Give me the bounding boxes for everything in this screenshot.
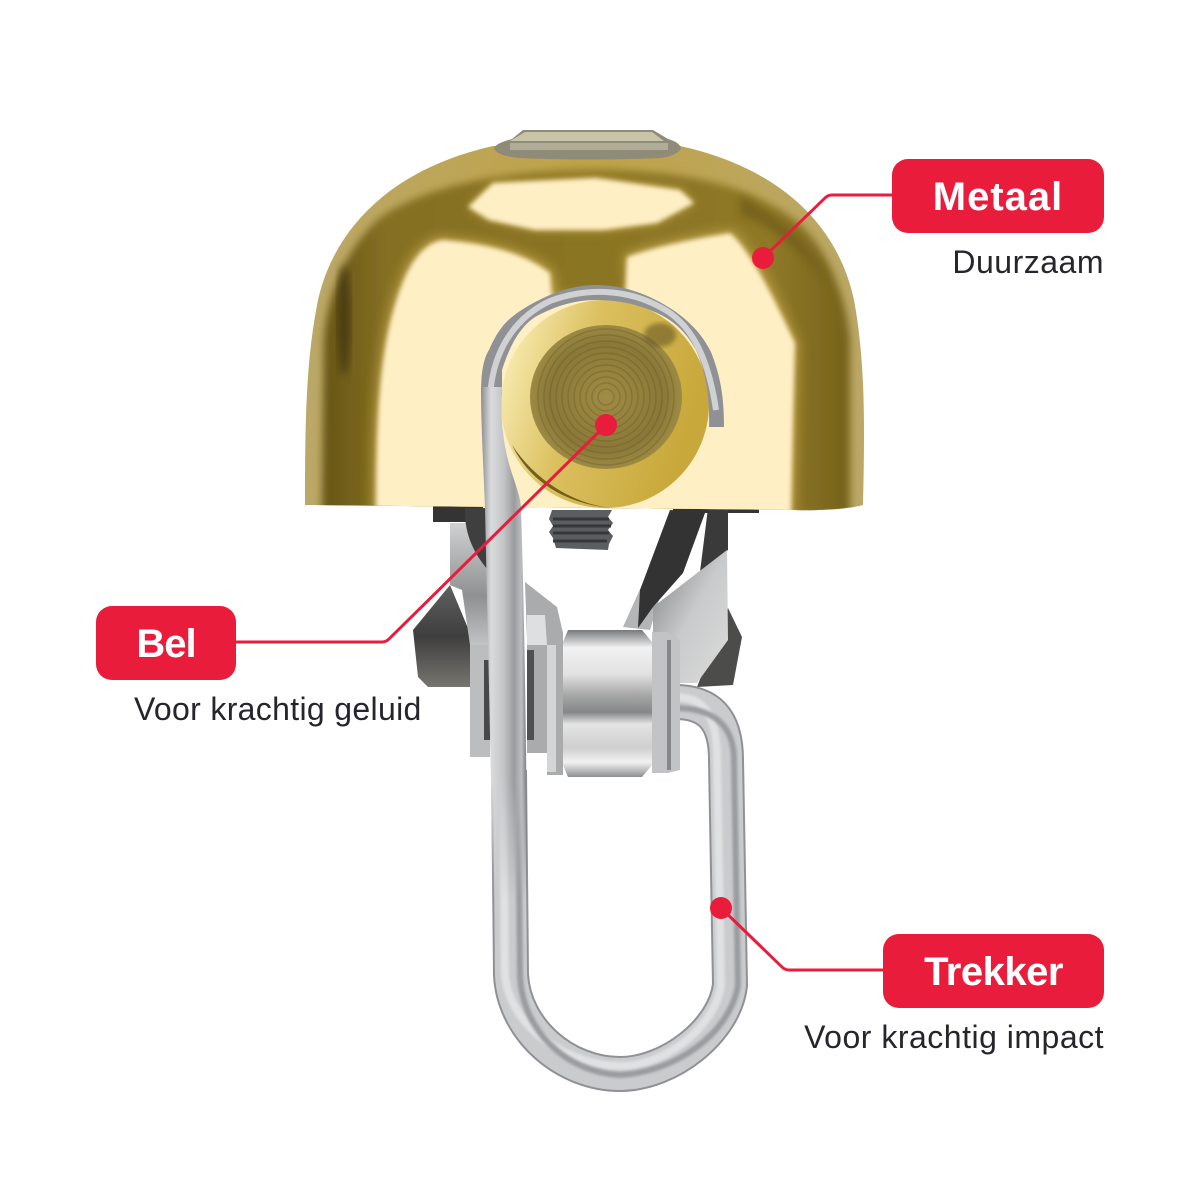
label: Metaal: Metaal [933,175,1063,219]
label: Bel [96,606,236,680]
icon: left bracket behind lever [470,582,563,775]
icon: brass dome [305,146,864,525]
highlight: top reflection [468,178,694,230]
icon: striker disc [501,300,709,508]
icon: clamp parts under the dome [413,506,759,687]
callout dot: metaal [752,247,774,269]
icon: top bolt [494,130,681,160]
icon: roller and right flange [563,630,680,777]
callout dot: bel [595,414,617,436]
text: Voor krachtig geluid: Voor krachtig geluid [134,691,422,727]
illustration: bicycle bell with callout lines [236,130,892,1092]
label: Bel: Bel [136,622,196,666]
label: Metaal [892,159,1104,233]
callout dot: trekker [710,897,732,919]
icon: spring wire lever [481,285,724,905]
icon: pull ring [503,697,738,1075]
callout line: bel [235,425,606,642]
callout line: metaal [763,195,893,258]
icon: threaded screw [549,510,613,550]
callout line: trekker [721,908,884,970]
label: Trekker: Trekker [924,950,1063,994]
text: Voor krachtig impact: Voor krachtig impact [804,1019,1104,1055]
label: Trekker [883,934,1104,1008]
text: Duurzaam: Duurzaam [952,244,1104,280]
